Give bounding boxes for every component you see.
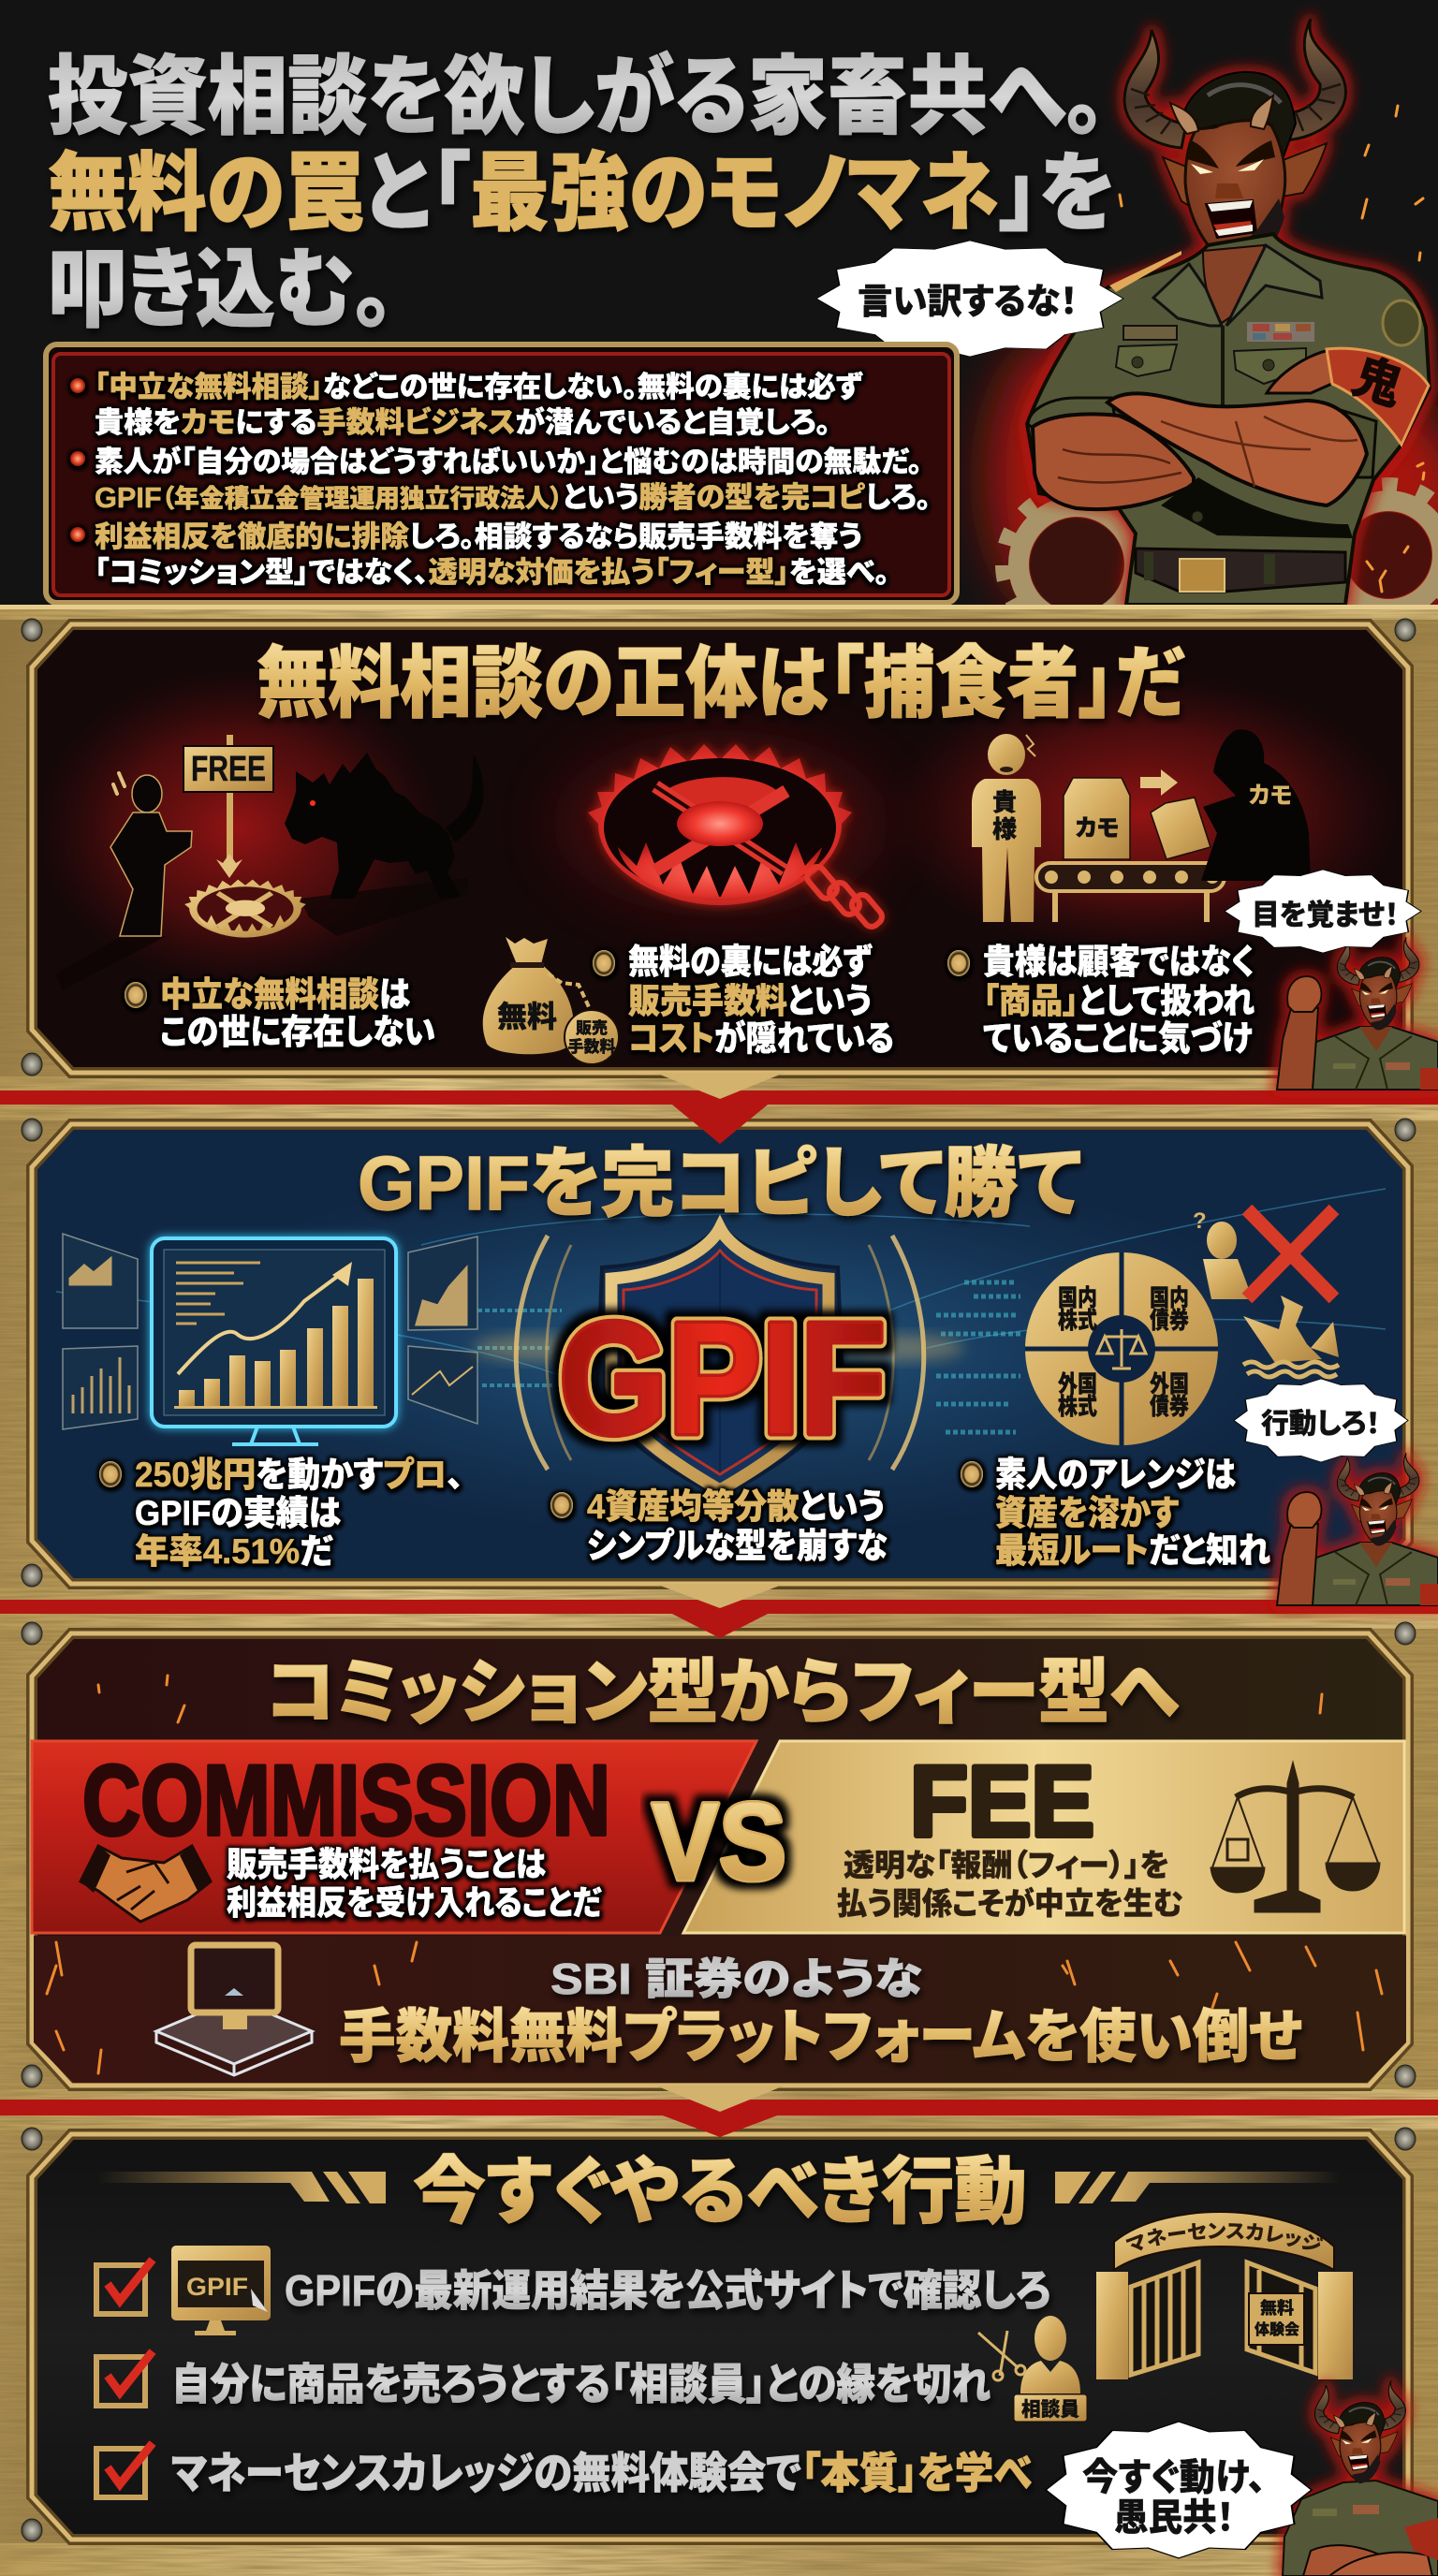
- mini devil 2: [1277, 1453, 1438, 1605]
- icon: GPIF site monitor: GPIF: [186, 2273, 248, 2301]
- panel 2: GPIF: [32, 1105, 1408, 1584]
- checkbox: [96, 2260, 153, 2314]
- conveyor: [1036, 863, 1225, 922]
- sign FREE: [183, 735, 273, 878]
- chart: four asset pie: 債券: [1150, 1308, 1189, 1334]
- bullet 1: [70, 371, 864, 439]
- milk carton: [1064, 778, 1130, 859]
- row 1: [96, 2246, 1050, 2335]
- icon: money bag: 販売: [576, 1018, 608, 1037]
- sparks: [1120, 106, 1424, 592]
- bullet text: right: 資産を溶かす: [995, 1494, 1179, 1532]
- illustration: GPIF shield: [473, 1221, 964, 1498]
- title: 無料の罠と「最強のモノマネ」を: [48, 146, 1115, 242]
- bullet 2: 素人が「自分の場合はどうすればいいか」と悩むのは時間の無駄だ。: [95, 446, 922, 478]
- row 2: 自分に商品を売ろうとする「相談員」との縁を切れ: [171, 2360, 990, 2408]
- bullet 1: 貴様をカモにする手数料ビジネスが潜んでいると自覚しろ。: [95, 406, 830, 439]
- callout: act: [1234, 1379, 1408, 1462]
- icon: thinking person with X: ?: [1193, 1208, 1207, 1234]
- icon: monitor on glass platform: [156, 1945, 312, 2075]
- bullet 1: 「中立な無料相談」などこの世に存在しない。無料の裏には必ず: [95, 371, 864, 403]
- bullet text: left: 250兆円を動かすプロ、: [135, 1456, 463, 1494]
- callout: move now: [1046, 2422, 1312, 2558]
- GPIF emblem text: GPIF: [559, 1290, 886, 1468]
- icon: gate: 無料: [1260, 2298, 1294, 2318]
- figure: kisama: [972, 734, 1041, 922]
- bullet text: right: 「商品」として扱われ: [983, 982, 1255, 1020]
- bullet text: left: GPIFの実績は: [135, 1494, 341, 1532]
- neck and collar: [1109, 245, 1322, 412]
- section divider 2: [0, 1584, 1438, 1638]
- chart: four asset pie: 株式: [1058, 1308, 1097, 1334]
- icon: GPIF site monitor: [171, 2246, 271, 2335]
- small trap: [184, 880, 306, 938]
- dark figure: [1201, 729, 1311, 881]
- panel: commission: 販売手数料を払うことは: [227, 1845, 546, 1883]
- heading: 今すぐやるべき行動: [413, 2150, 1027, 2232]
- bullet text: middle: 無料の裏には必ず: [628, 943, 873, 981]
- panel: summary box: [46, 344, 957, 603]
- illustration: monitor chart: [63, 1234, 477, 1444]
- chart: four asset pie: 国内: [1058, 1285, 1097, 1311]
- bullet text: right: 貴様は顧客ではなく: [983, 943, 1255, 981]
- icon: consultant with scissors: [978, 2316, 1087, 2422]
- side dashboards: [63, 1234, 477, 1429]
- bullet text: right: [947, 943, 1255, 1058]
- panel: fee: 透明な「報酬（フィー）」を: [844, 1848, 1169, 1882]
- sign FREE: FREE: [191, 750, 266, 789]
- bullet text: middle: 4資産均等分散という: [587, 1487, 885, 1526]
- icon: handshake: [81, 1846, 211, 1922]
- bullet 3: [70, 520, 889, 589]
- icon: gears: [1004, 486, 1438, 637]
- heading ornaments: [96, 2172, 1341, 2203]
- figure: kisama: 様: [992, 815, 1017, 843]
- row 1: GPIFの最新運用結果を公式サイトで確認しろ: [285, 2266, 1050, 2315]
- bullet 2: [70, 446, 931, 514]
- icon: scales: [1211, 1762, 1380, 1912]
- data streaks: [477, 1282, 1020, 1432]
- panel: fee: [683, 1741, 1404, 1933]
- gold frame background: [0, 605, 1438, 2576]
- illustration: free trap and wolf: [56, 735, 484, 990]
- bullet text: middle: 販売手数料という: [628, 982, 872, 1020]
- bullet text: middle: [550, 1487, 888, 1565]
- icon: money bag: 手数料: [567, 1037, 616, 1056]
- VS emblem: VS: [652, 1780, 786, 1904]
- checkbox: [96, 2351, 153, 2406]
- bullet text: middle: [593, 943, 894, 1058]
- belt: [1136, 511, 1345, 592]
- panel: fee: FEE: [910, 1745, 1094, 1857]
- armband kanji: 鬼: [1346, 349, 1409, 416]
- panel: commission: 利益相反を受け入れることだ: [227, 1883, 602, 1922]
- bullet 3: 「コミッション型」ではなく、透明な対価を払う「フィー型」を選べ。: [95, 556, 889, 589]
- callout: act: 行動しろ！: [1261, 1409, 1380, 1440]
- panel 1: predator: [32, 624, 1408, 1073]
- illustration: you are the product: [972, 729, 1311, 922]
- figure: kisama: 貴: [992, 788, 1017, 816]
- crossed arms: [1028, 348, 1429, 538]
- bullet text: left: [125, 975, 435, 1051]
- bullet 3: 利益相反を徹底的に排除しろ。相談するなら販売手数料を奪う: [95, 520, 862, 553]
- icon: money bag: 無料: [497, 1000, 557, 1033]
- callout: move now: 今すぐ動け、: [1082, 2457, 1266, 2498]
- panel: fee: 払う関係こそが中立を生む: [837, 1886, 1183, 1921]
- bullet text: right: 素人のアレンジは: [995, 1456, 1236, 1494]
- bullet text: left: 年率4.51%だ: [135, 1532, 333, 1571]
- closing line: [339, 1954, 1302, 2070]
- header section: [0, 0, 1438, 646]
- icon: sinking ship: [1243, 1295, 1339, 1377]
- bullet text: left: 中立な無料相談は: [160, 975, 410, 1014]
- heading: 無料相談の正体は「捕食者」だ: [257, 639, 1185, 727]
- callout: move now: 愚民共！: [1114, 2497, 1234, 2539]
- bullet text: right: [961, 1456, 1270, 1570]
- bullet text: right: ていることに気づけ: [983, 1019, 1253, 1058]
- bullet text: middle: コストが隠れている: [628, 1018, 894, 1058]
- closing line: SBI 証券のような: [550, 1954, 922, 2003]
- section divider 3: [0, 2086, 1438, 2137]
- section divider 1: [0, 1073, 1438, 1144]
- person silhouette: [110, 775, 192, 936]
- callout: speech burst: 言い訳するな！: [858, 283, 1078, 322]
- dark figure: カモ: [1249, 783, 1292, 809]
- bullet text: middle: シンプルな型を崩すな: [587, 1527, 888, 1565]
- icon: money bag: [483, 937, 619, 1064]
- icon: consultant with scissors: 相談員: [1021, 2399, 1079, 2421]
- chart: four asset pie: 外国: [1150, 1371, 1189, 1398]
- icon: gate: マネーセンスカレッジ: [1125, 2222, 1323, 2250]
- bullet text: right: 最短ルートだと知れ: [995, 1531, 1270, 1570]
- chart: four asset pie: 債券: [1150, 1394, 1189, 1420]
- callout: wake up: 目を覚ませ！: [1252, 899, 1399, 931]
- panel: devil sergeant mascot: [988, 19, 1438, 646]
- title: 叩き込む。: [48, 242, 394, 338]
- heading: コミッション型からフィー型へ: [266, 1653, 1180, 1733]
- chain: [804, 864, 885, 929]
- pockets and medals: [1116, 300, 1420, 384]
- sparks: [47, 1676, 1382, 2073]
- icon: gate: [1096, 2211, 1353, 2379]
- bullet text: left: [99, 1456, 463, 1571]
- mini devil 3 with crossed arms: [1283, 2380, 1438, 2576]
- chart: four asset pie: 国内: [1150, 1285, 1189, 1311]
- heading: GPIFを完コピして勝て: [358, 1141, 1082, 1226]
- title: [48, 50, 1115, 338]
- panel 4: action list: [26, 2115, 1414, 2545]
- icon: thinking person with X: [1193, 1208, 1334, 1299]
- panel 3: commission vs fee: [32, 1614, 1408, 2086]
- title: 投資相談を欲しがる家畜共へ。: [48, 50, 1106, 145]
- panel: commission: [32, 1741, 756, 1933]
- checkbox: [96, 2443, 153, 2497]
- callout: speech burst: [816, 241, 1123, 357]
- icon: gate: 体験会: [1255, 2320, 1299, 2338]
- bullet 2: GPIF（年金積立金管理運用独立行政法人）という勝者の型を完コピしろ。: [95, 481, 931, 514]
- illustration: glowing bear trap: [588, 744, 885, 929]
- chart: four asset pie: 外国: [1058, 1371, 1097, 1398]
- chart: four asset pie: 株式: [1058, 1394, 1097, 1420]
- monitor: [152, 1238, 396, 1427]
- milk carton: カモ: [1076, 815, 1119, 842]
- panel: commission: COMMISSION: [82, 1744, 610, 1856]
- mini devil 1: [1277, 937, 1438, 1090]
- wolf silhouette: [285, 753, 484, 899]
- row 3: マネーセンスカレッジの無料体験会で「本質」を学べ: [171, 2449, 1032, 2497]
- screws: [22, 619, 1416, 2541]
- closing line: 手数料無料プラットフォームを使い倒せ: [339, 2005, 1302, 2070]
- chart: four asset pie: [1025, 1252, 1218, 1445]
- GPIF emblem text: GPIF: [559, 1290, 886, 1468]
- bullet text: left: この世に存在しない: [160, 1013, 435, 1051]
- bars: [179, 1279, 374, 1406]
- callout: wake up: [1225, 870, 1421, 953]
